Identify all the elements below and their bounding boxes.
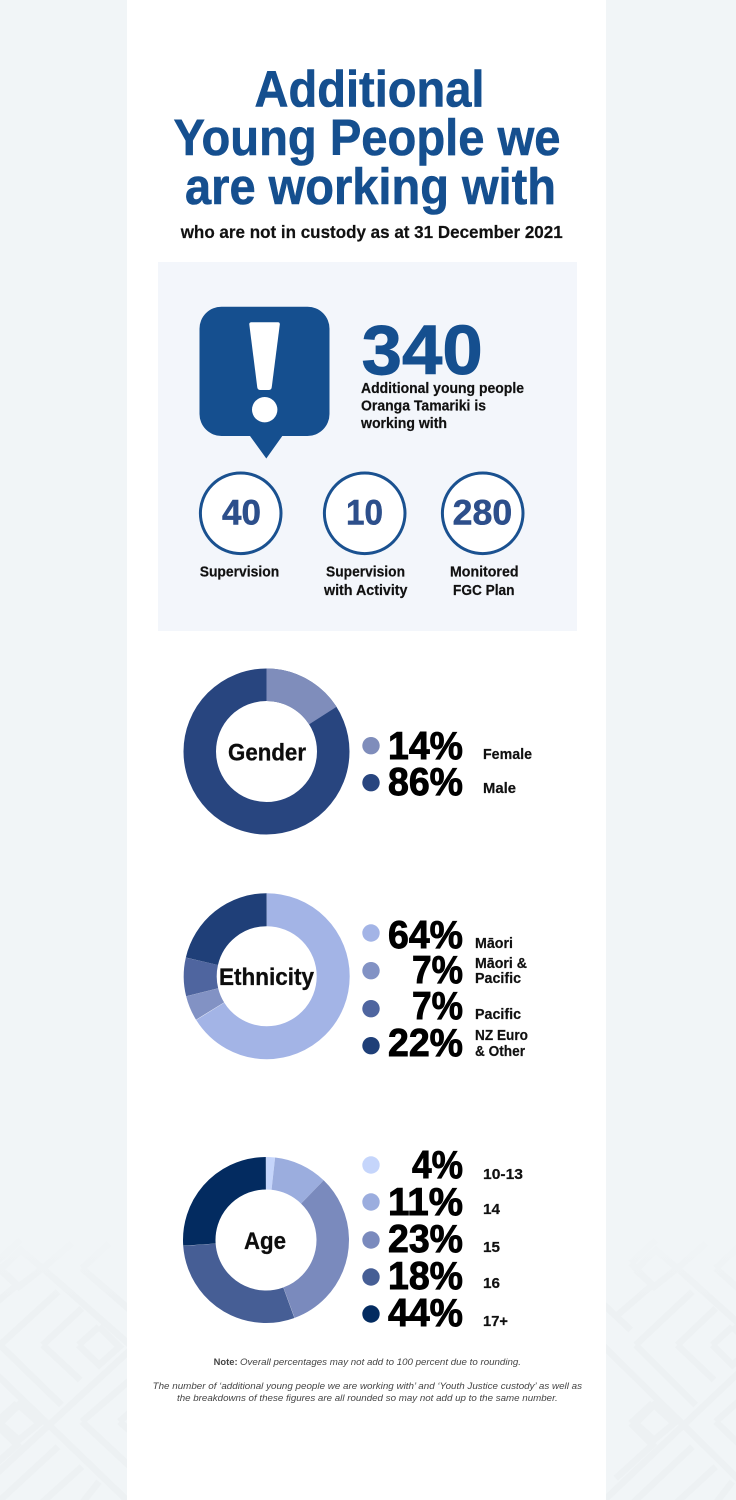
stat: 10 supervision with activity: Supervision [326,565,405,581]
legend: ethnicity: Māori [475,936,513,952]
legend: ethnicity: Pacific [475,1007,521,1023]
panel: white content column [127,0,606,1500]
legend: age: 4% [412,1144,463,1187]
legend: age [362,1144,523,1335]
description of 340 [360,381,524,432]
footnotes [153,1357,582,1404]
legend: gender: Male [483,781,516,797]
subtitle: who are not in custody as at 31 December 2021 [180,222,563,242]
stat: 280 monitored FGC plan [442,473,523,599]
stat: 10 supervision with activity: 10 [346,494,383,532]
legend: age: 11% [388,1181,463,1224]
legend: age: 16 [483,1276,500,1292]
title: Additional [254,60,484,118]
stat: 10 supervision with activity: with Activity [323,583,408,599]
icon: exclamation speech bubble [200,307,330,458]
panel: ethnicity [175,885,528,1068]
description of 340: Additional young people [361,381,524,397]
legend: gender: 14% [388,725,463,768]
stat: 280 monitored FGC plan: FGC Plan [453,583,514,599]
panel: gender [200,685,532,818]
legend: gender [362,725,532,804]
legend: age: 14 [483,1202,500,1218]
donut chart: age [172,1146,360,1334]
legend: gender: Female [483,747,532,763]
legend: age: 10-13 [483,1167,523,1183]
stat: 40 supervision [200,473,281,581]
stat: 40 supervision: Supervision [200,565,279,581]
description of 340: Oranga Tamariki is [361,399,486,415]
legend: age: 44% [388,1292,463,1335]
legend: ethnicity: Māori & [475,956,528,972]
legend: ethnicity: 64% [388,914,463,957]
title: Young People we [174,109,560,166]
legend: gender: 86% [388,761,463,804]
title: are working with [185,158,556,215]
legend: ethnicity: 7% [412,949,463,992]
legend: age: 17+ [483,1314,508,1330]
donut label: age: Age [244,1228,286,1255]
legend: age: 18% [388,1255,463,1298]
stat: 280 monitored FGC plan: 280 [453,494,512,532]
donut chart: ethnicity [175,885,358,1068]
donut label: ethnicity: Ethnicity [219,964,315,991]
legend: ethnicity [362,914,528,1065]
footnotes: Note: [214,1357,238,1368]
stat: 40 supervision: 40 [222,494,261,532]
panel: age [172,1144,523,1335]
legend: ethnicity: NZ Euro [475,1028,528,1044]
legend: ethnicity: 22% [388,1022,463,1065]
donut chart: gender [200,685,333,818]
legend: ethnicity: & Other [475,1044,525,1060]
stat: 280 monitored FGC plan: Monitored [450,565,518,581]
legend: age: 23% [388,1218,463,1261]
description of 340: working with [360,416,447,432]
panel: additional young people total [158,262,577,631]
stat: 10 supervision with activity [323,473,408,599]
legend: ethnicity: Pacific [475,971,521,987]
legend: ethnicity: 7% [412,985,463,1028]
donut label: gender: Gender [228,740,306,767]
title [174,60,560,215]
big number 340: 340 [362,311,483,389]
footnotes: Overall percentages may not add to 100 percent due to rounding. [240,1357,521,1368]
footnotes: the breakdowns of these figures are all rounded so may not add up to the same number. [177,1393,558,1404]
footnotes: The number of ‘additional young people we are working with’ and ‘Youth Justice custody’ as well as [153,1381,582,1392]
legend: age: 15 [483,1240,500,1256]
